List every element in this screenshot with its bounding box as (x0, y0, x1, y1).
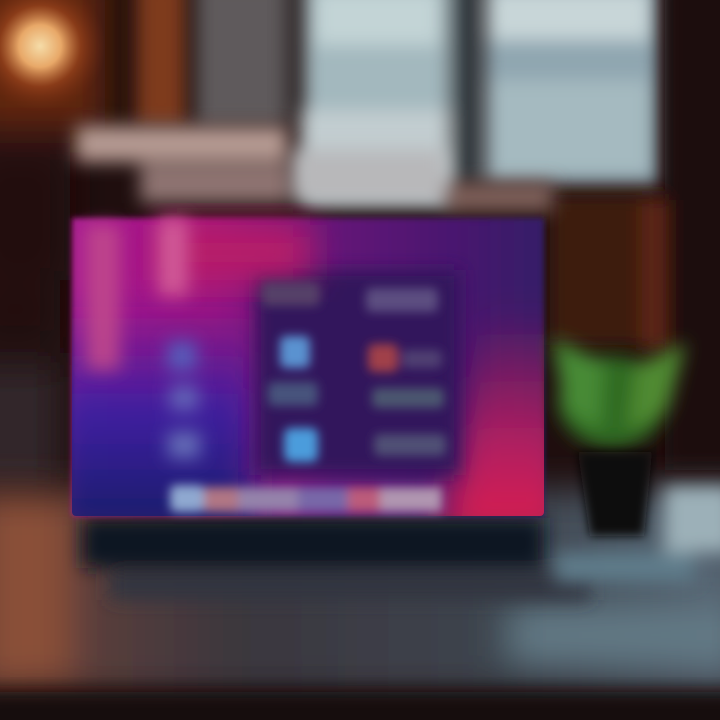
panel: orange wall upper left (0, 0, 105, 490)
plant pot (578, 452, 652, 536)
laptop base (82, 518, 590, 600)
panel: dark wooden frame right (550, 0, 720, 470)
text block: blurred headline band (76, 126, 553, 212)
icon: potted plant (552, 338, 686, 536)
left column of menu items (86, 218, 200, 458)
plant foliage (552, 338, 686, 448)
dock bar (170, 485, 442, 512)
desktop icons (262, 282, 446, 462)
table front edge (0, 692, 720, 720)
white object at right edge (555, 486, 720, 582)
red gradient lower right of screen (420, 313, 544, 516)
panel: bright window (300, 0, 660, 205)
bright pink strip top (160, 225, 310, 280)
central dark panel (255, 270, 460, 475)
table surface (0, 490, 720, 695)
icon: glowing lamp (0, 0, 106, 112)
panel: orange curtain (136, 0, 186, 125)
panel: grey curtain (196, 0, 302, 125)
panel: laptop screen (50, 218, 570, 540)
blue gradient lower left of screen (50, 300, 255, 540)
